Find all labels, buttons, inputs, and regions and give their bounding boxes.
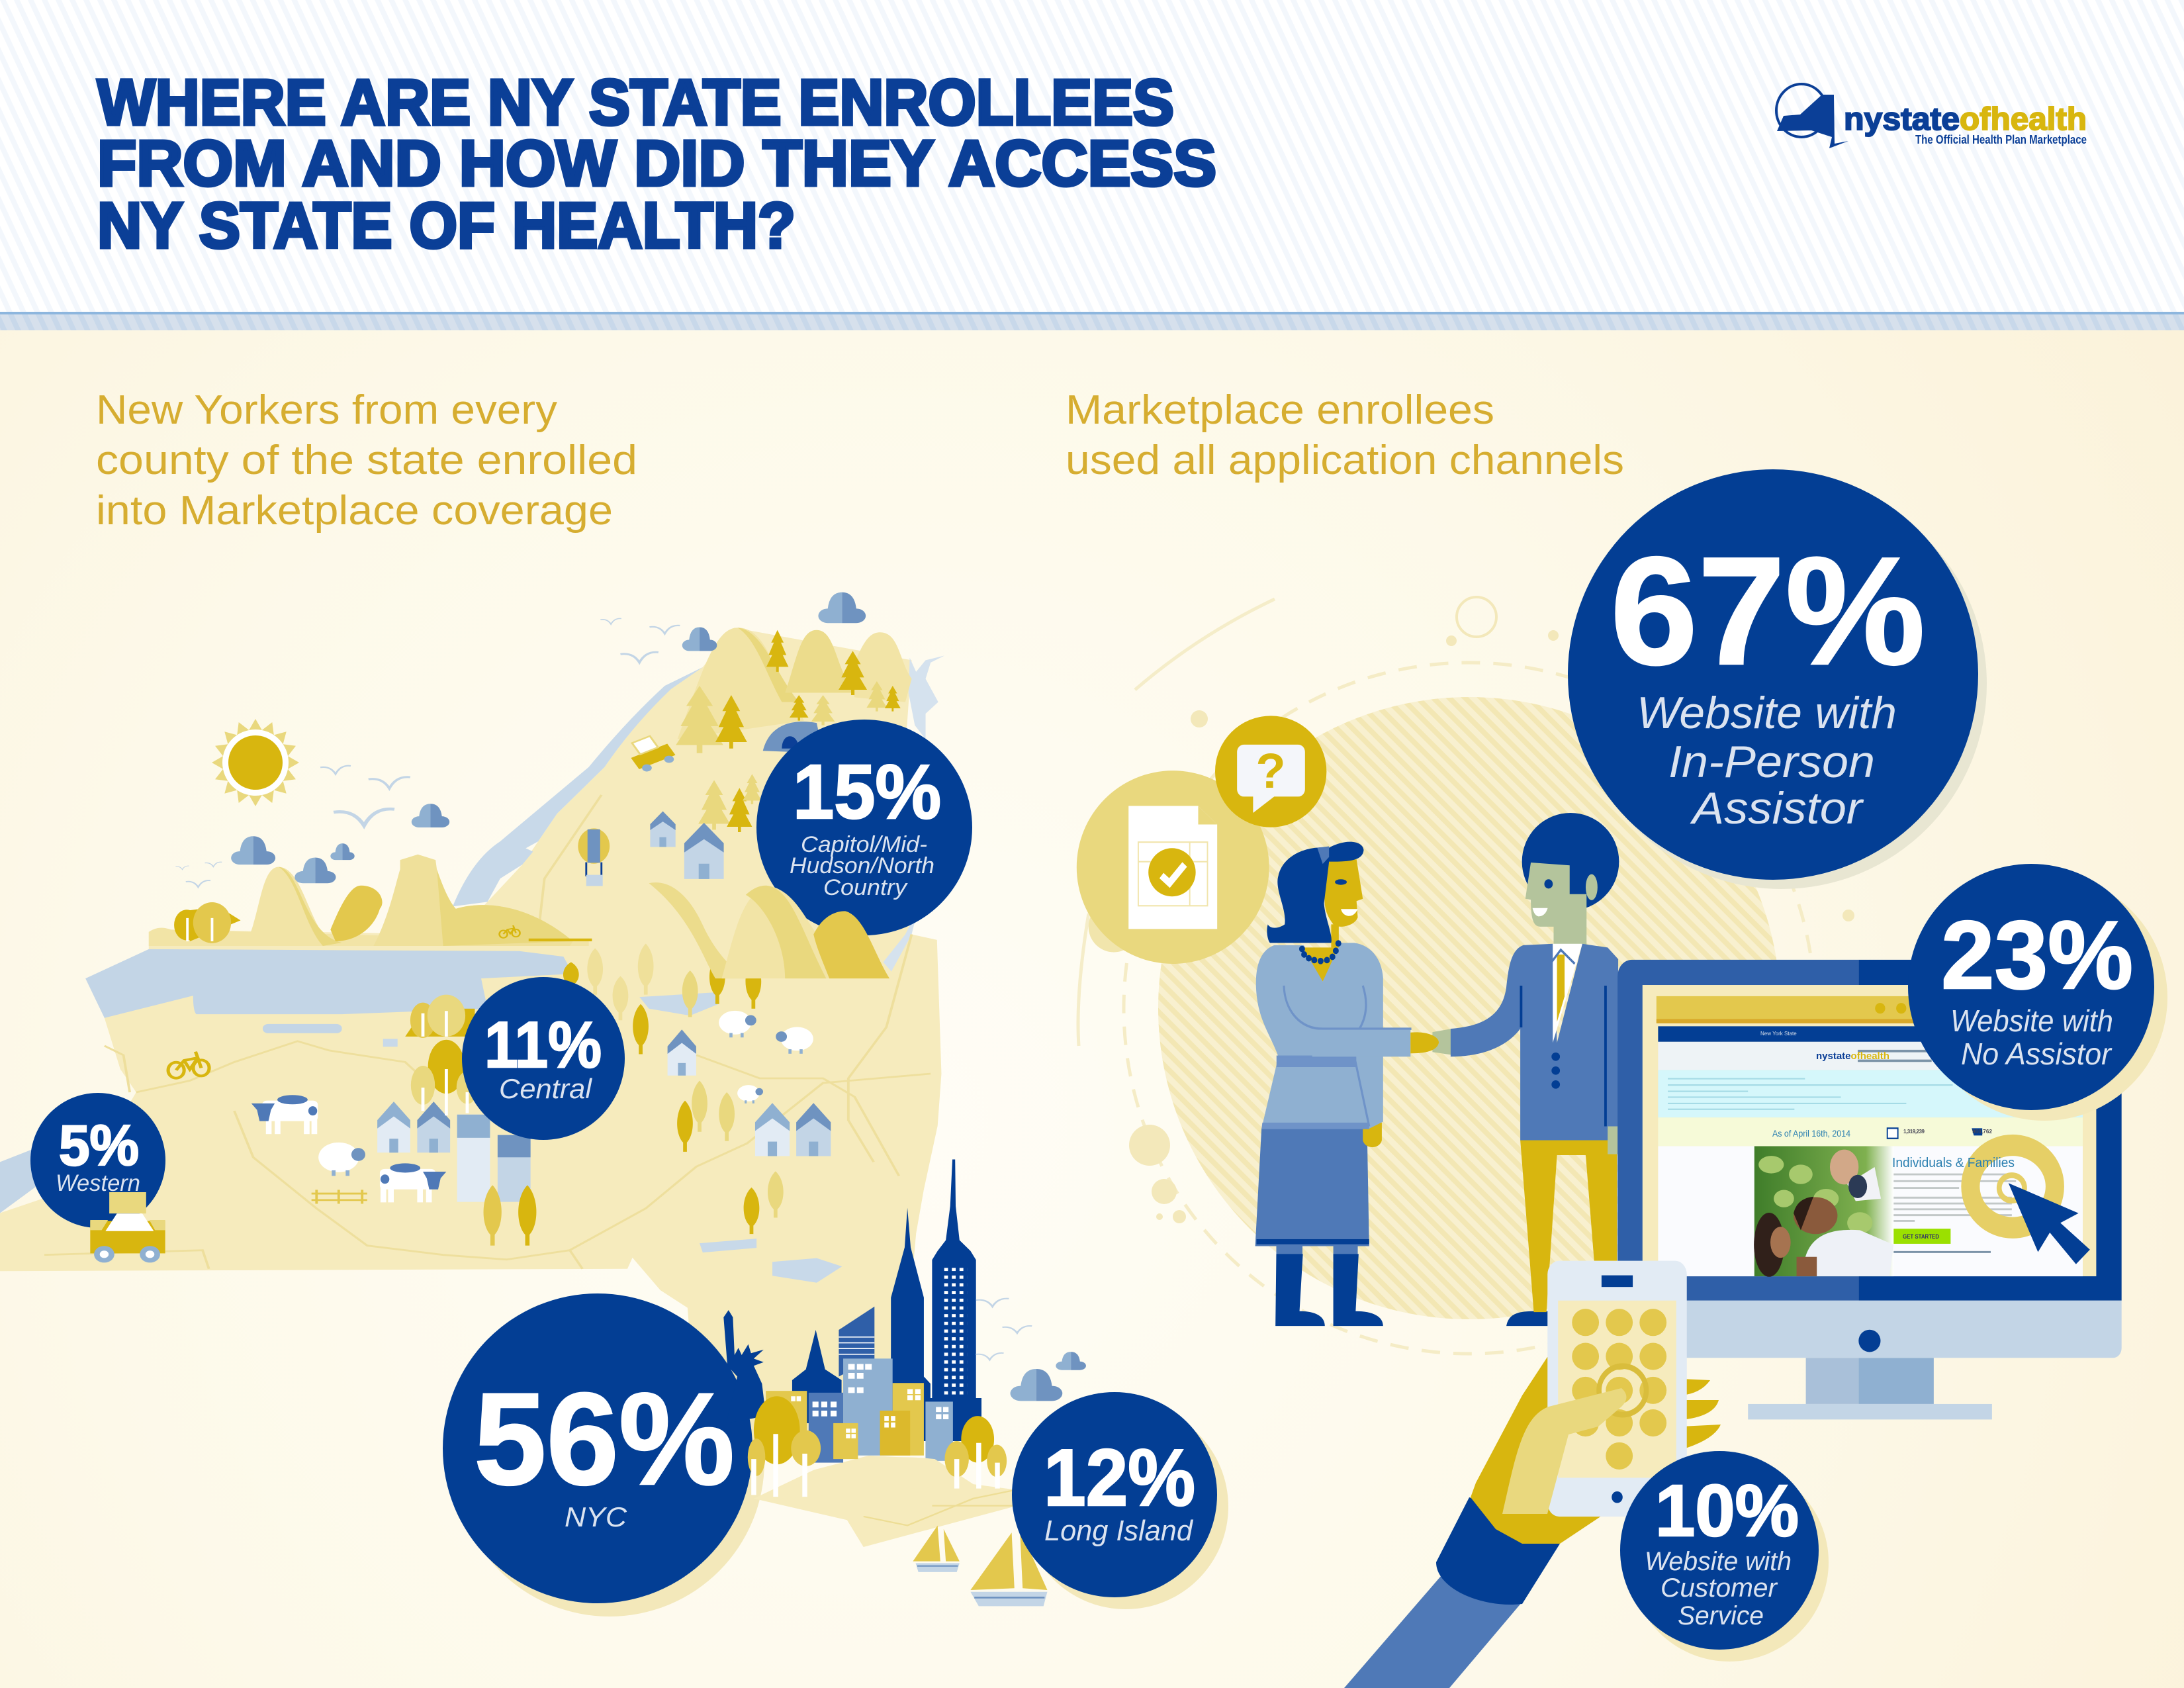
central trees <box>405 995 478 1115</box>
icon: sun <box>212 719 299 806</box>
stat: 67% Website with In-Person Assistor: Assistor <box>1690 783 1864 833</box>
phone <box>1547 1261 1687 1517</box>
person illustrations and icons <box>1077 716 1619 1326</box>
left subheading: county of the state enrolled <box>96 438 637 483</box>
sleeve <box>1344 1575 1522 1688</box>
stat: 11% Central <box>462 977 625 1140</box>
icon: bicycle <box>168 1052 209 1078</box>
pointing finger and palm <box>1502 1388 1627 1514</box>
target rings <box>1970 1145 2055 1228</box>
left subheading <box>96 387 637 534</box>
skyline birds <box>976 1299 1032 1360</box>
sailboats <box>913 1525 1047 1606</box>
monitor stand <box>1748 1358 1992 1419</box>
website screen text: 1,319,239 <box>1903 1129 1925 1135</box>
logo: NY State of Health <box>1776 84 2087 148</box>
farm animals <box>251 1011 813 1202</box>
stat: 10% Website with Customer Service: Service <box>1678 1601 1764 1630</box>
stat: 12% Long Island: 12% <box>1044 1432 1195 1523</box>
title: FROM AND HOW DID THEY ACCESS <box>97 127 1216 199</box>
fence <box>312 1190 367 1203</box>
website screen text: Individuals & Families <box>1892 1156 2015 1170</box>
title <box>97 66 1216 261</box>
header band <box>0 0 2184 330</box>
midtown buildings <box>766 1358 953 1463</box>
stat: 67% Website with In-Person Assistor: Website with <box>1637 688 1897 738</box>
stat: 15% Capitol/Mid-Hudson/North Country <box>756 720 972 935</box>
houses <box>377 811 831 1202</box>
St Lawrence river <box>453 667 703 906</box>
north shore mountains <box>149 855 592 946</box>
stat: 11% Central: 11% <box>484 1008 602 1081</box>
decorative ring and dots <box>1078 597 1854 1354</box>
title: NY STATE OF HEALTH? <box>97 189 796 261</box>
website screen text: GET STARTED <box>1903 1233 1939 1240</box>
New York City skyline and Long Island <box>723 1159 1086 1606</box>
website screen text <box>1760 1031 2015 1240</box>
logo: NY State of Health: nystate <box>1844 102 1960 137</box>
monitor frame <box>1617 960 2122 1358</box>
county lines <box>44 795 931 1269</box>
stat: 23% Website with No Assistor: 23% <box>1941 901 2133 1009</box>
icon: cursor arrow <box>2009 1183 2090 1264</box>
Lake Ontario <box>85 949 573 1033</box>
stat: 5% Western: Western <box>56 1170 140 1196</box>
cuff <box>1436 1497 1560 1605</box>
stat: 12% Long Island: Long Island <box>1044 1515 1193 1547</box>
stat: 56% NYC: 56% <box>474 1366 735 1512</box>
stat: 15% Capitol/Mid-Hudson/North Country: Country <box>823 875 908 900</box>
icon: question bubble <box>1215 716 1326 827</box>
city trees <box>748 1396 1007 1497</box>
hand holding phone <box>1344 1261 1721 1688</box>
icon: rooftop car on road <box>623 733 679 774</box>
stat: 15% Capitol/Mid-Hudson/North Country: 15% <box>793 749 941 835</box>
stat: 10% Website with Customer Service: Customer <box>1661 1573 1778 1603</box>
icon: document with checkmark <box>1077 771 1269 964</box>
title: WHERE ARE NY STATE ENROLLEES <box>97 66 1174 138</box>
ponds <box>383 992 842 1283</box>
website photo <box>1754 1146 1893 1277</box>
desktop computer <box>1617 960 2122 1419</box>
stat: 11% Central: Central <box>499 1073 593 1104</box>
north shore trees <box>174 902 520 943</box>
Long Island lines <box>864 1489 1017 1525</box>
website screen text: 960,762 <box>1972 1129 1993 1135</box>
stat: 10% Website with Customer Service <box>1620 1451 1829 1662</box>
stat: 56% NYC: NYC <box>565 1501 627 1532</box>
icon: tent <box>763 722 823 753</box>
woman's handshake hand <box>1410 1032 1439 1053</box>
Lake Erie <box>0 1147 38 1213</box>
New York State map <box>0 592 944 1454</box>
icon: hot air balloon <box>578 828 610 886</box>
left subheading: into Marketplace coverage <box>96 488 613 534</box>
website screen text: nystateofhealth <box>1816 1051 1889 1062</box>
stat: 56% NYC <box>443 1293 764 1617</box>
question mark: ? <box>1255 743 1286 798</box>
map landmass <box>0 628 941 1454</box>
stat: 5% Western <box>30 1093 165 1228</box>
stat: 15% Capitol/Mid-Hudson/North Country: Hudson/North <box>790 853 934 878</box>
left subheading: New Yorkers from every <box>96 387 557 433</box>
right subheading <box>1066 387 1624 483</box>
poplar trees <box>484 943 784 1246</box>
stat: 15% Capitol/Mid-Hudson/North Country: Capitol/Mid- <box>801 832 927 857</box>
Long Island <box>754 1456 1017 1547</box>
stat: 10% Website with Customer Service: Website with <box>1645 1547 1792 1576</box>
woman <box>1255 842 1412 1326</box>
browser window <box>1643 985 2096 1276</box>
logo: NY State of Health: The Official Health Plan Marketplace <box>1915 133 2087 146</box>
skyline clouds <box>1011 1352 1086 1401</box>
Long Island hill <box>781 1457 974 1499</box>
foreground mountains over 15% badge <box>649 882 889 978</box>
stat: 23% Website with No Assistor: No Assistor <box>1961 1037 2113 1071</box>
logo: NY State of Health: ofhealth <box>1960 102 2087 137</box>
stat: 67% Website with In-Person Assistor: 67% <box>1610 526 1925 697</box>
stat: 67% Website with In-Person Assistor: In-Person <box>1668 737 1875 787</box>
Statue of Liberty <box>723 1310 766 1423</box>
stat: 23% Website with No Assistor <box>1908 864 2167 1121</box>
northern mountains and pines <box>676 628 912 832</box>
clouds <box>231 592 866 883</box>
fingers behind phone <box>1681 1379 1721 1450</box>
right subheading: Marketplace enrollees <box>1066 387 1494 433</box>
stat: 10% Website with Customer Service: 10% <box>1655 1470 1799 1552</box>
Chrysler Building <box>891 1208 931 1441</box>
website screen text: As of April 16th, 2014 <box>1772 1128 1850 1139</box>
man <box>1432 813 1619 1326</box>
website screen text: New York State <box>1760 1031 1797 1037</box>
stat: 5% Western: 5% <box>59 1114 139 1178</box>
stat: 12% Long Island <box>1012 1392 1228 1609</box>
hatched background circle <box>1158 697 1780 1319</box>
icon: taxi car <box>90 1192 165 1262</box>
right subheading: used all application channels <box>1066 438 1624 483</box>
Empire State Building <box>927 1159 981 1441</box>
glass tower <box>839 1307 874 1376</box>
church spire <box>792 1330 842 1423</box>
stat: 23% Website with No Assistor: Website with <box>1950 1004 2113 1038</box>
birds <box>175 618 680 887</box>
stat: 67% Website with In-Person Assistor <box>1568 469 1987 889</box>
gold hand <box>1471 1357 1602 1544</box>
Lake Champlain <box>883 655 944 972</box>
